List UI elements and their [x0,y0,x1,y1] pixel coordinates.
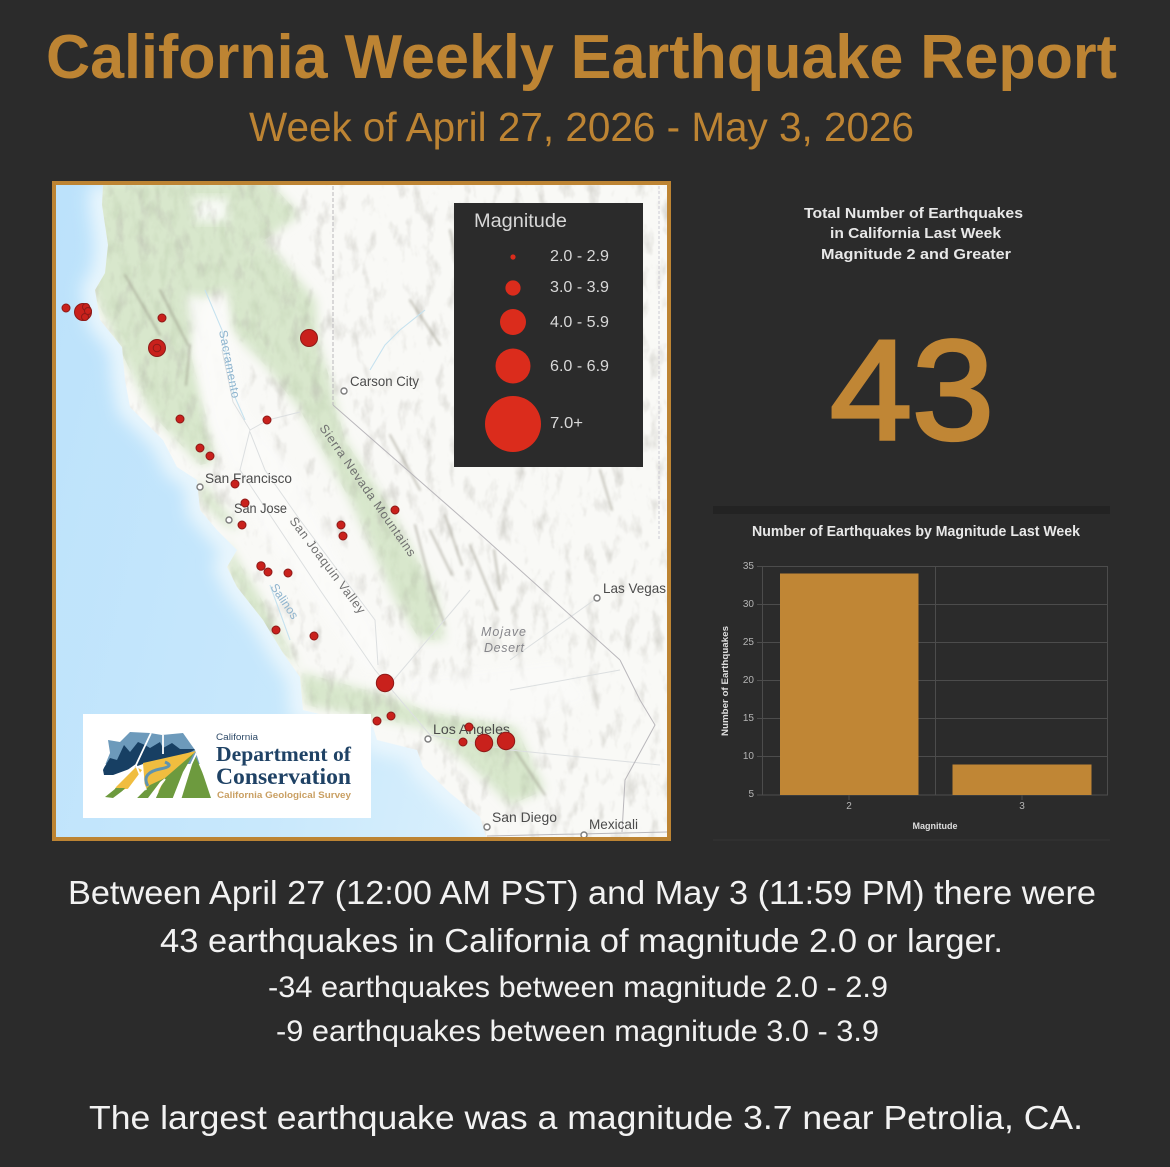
heading: total number: in California Last Week [830,226,1002,242]
map labels: San Diego [492,809,557,825]
logo: California Department of Conservation: California Geological Survey [217,790,352,801]
logo: California Department of Conservation: Department of [216,742,352,766]
heading: total number [804,206,1023,263]
y axis labels: 5 [748,789,754,800]
panel: earthquake map: Salinos [268,581,301,622]
earthquake markers [62,304,515,752]
panel: bar chart by magnitude [720,524,1108,831]
panel: earthquake map: Sacramento [216,329,243,400]
heading: total number: Total Number of Earthquakes [804,206,1023,222]
summary text block: 43 earthquakes in California of magnitude 2.0 or larger. [160,922,1003,959]
summary text block: Between April 27 (12:00 AM PST) and May 3 (11:59 PM) there were [68,874,1096,911]
panel: earthquake map: Desert [484,641,525,655]
map labels: San Jose [234,500,287,516]
icon: bear [103,732,211,798]
y axis labels: 20 [743,675,754,686]
map labels: Las Vegas [603,580,666,596]
big number 43: 43 [830,311,994,470]
bars [780,574,1092,795]
legend: magnitude: 6.0 - 6.9 [550,358,609,375]
summary text block: -34 earthquakes between magnitude 2.0 - 2.9 [268,971,888,1004]
map labels [205,373,666,832]
x axis labels: 2 [846,801,852,812]
logo: California Department of Conservation: Conservation [216,764,351,789]
state borders [333,186,668,836]
chart heading: Number of Earthquakes by Magnitude Last Week [752,524,1081,540]
y axis labels: 35 [743,561,754,572]
summary text block: -9 earthquakes between magnitude 3.0 - 3.9 [276,1015,879,1048]
legend: magnitude: 7.0+ [550,415,583,432]
panel: bar chart by magnitude: Number of Earthquakes [720,626,730,736]
logo: California Department of Conservation: California [216,732,258,742]
valley and desert lowlands [186,295,590,725]
y axis labels: 10 [743,751,754,762]
map labels: San Francisco [205,470,292,486]
subtitle: date range: Week of April 27, 2026 - May 3, 2026 [249,104,914,150]
panel: earthquake map [52,180,671,841]
panel: earthquake map: Sierra Nevada Mountains [317,422,419,559]
legend: magnitude: Magnitude [474,211,567,232]
panel: earthquake map: Mojave [481,625,526,639]
map labels: Mexicali [589,816,638,832]
heading: total number: Magnitude 2 and Greater [821,247,1011,263]
panel: earthquake map: San Joaquin Valley [287,514,369,617]
legend: magnitude: 3.0 - 3.9 [550,279,609,296]
y axis labels [743,561,754,800]
summary text block: The largest earthquake was a magnitude 3.7 near Petrolia, CA. [89,1099,1083,1136]
legend: magnitude: 4.0 - 5.9 [550,314,609,331]
legend: magnitude [454,203,643,467]
logo: California Department of Conservation [83,714,371,818]
x axis labels [846,801,1025,812]
map labels: Los Angeles [433,721,510,737]
legend: magnitude: 2.0 - 2.9 [550,248,609,265]
grid [757,566,1108,800]
summary text block [68,874,1096,1136]
panel: total earthquake count [713,186,1110,506]
y axis labels: 30 [743,599,754,610]
y axis labels: 15 [743,713,754,724]
rivers and roads [222,350,660,765]
x axis labels: 3 [1019,801,1025,812]
axis titles: Magnitude [912,821,958,831]
title: California Weekly Earthquake Report [46,23,1117,92]
map labels: Carson City [350,373,419,389]
y axis labels: 25 [743,637,754,648]
